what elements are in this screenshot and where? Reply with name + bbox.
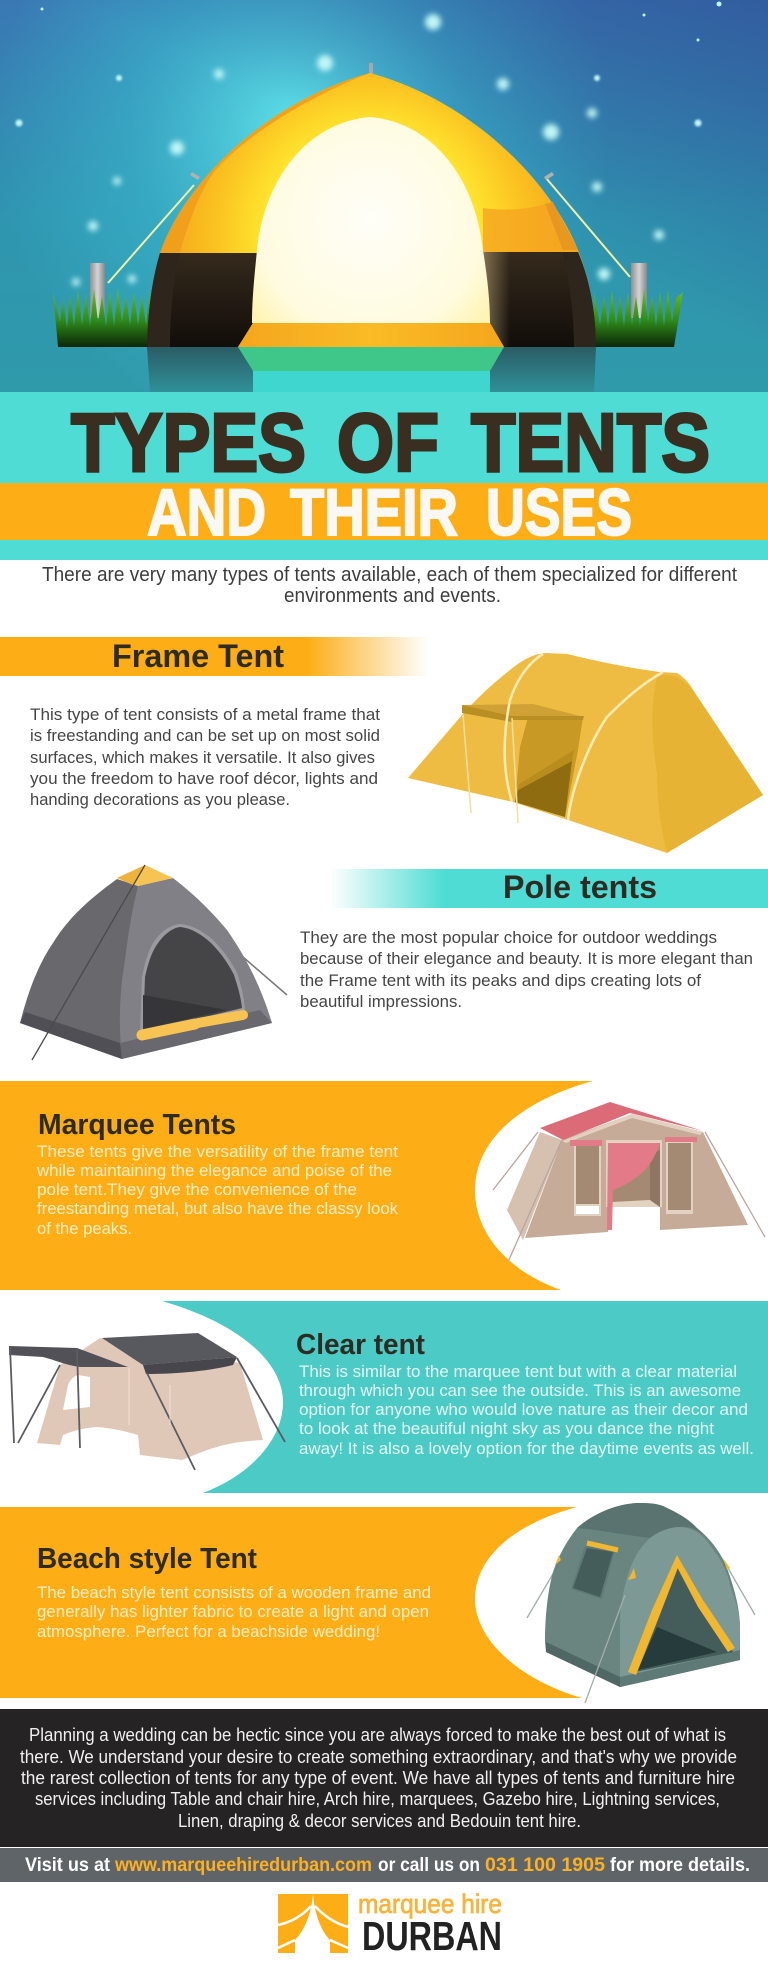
- hero: glowing tent at night: [0, 0, 768, 392]
- marquee heading: Marquee Tents: [38, 1109, 236, 1141]
- logo: marquee hire Durban: DURBAN: [362, 1913, 502, 1959]
- panel: beach style tent: [0, 1503, 755, 1703]
- icon: grey pole tent: [20, 865, 287, 1060]
- title banner: [0, 392, 768, 560]
- pole tents description: because of their elegance and beauty. It is more elegant than: [300, 949, 753, 968]
- fireflies: [16, 2, 722, 286]
- tent body: [147, 73, 596, 347]
- frame tent heading: Frame Tent: [112, 638, 284, 674]
- grass left: [53, 288, 150, 347]
- contact bar: 031 100 1905: [485, 1855, 605, 1876]
- logo wordmark: marquee hire: [358, 1889, 502, 1919]
- beach heading: Beach style Tent: [37, 1543, 257, 1575]
- frame tent description: you the freedom to have roof décor, lights and: [30, 769, 378, 788]
- closing text panel: [0, 1709, 768, 1847]
- pole tents description: beautiful impressions.: [300, 992, 462, 1011]
- title line 2: [147, 475, 632, 549]
- pole tents heading band: [330, 869, 768, 908]
- clear panel background: [162, 1301, 768, 1493]
- panel: frame tent: [0, 637, 763, 853]
- marquee description: freestanding metal, but also have the classy look: [37, 1199, 398, 1218]
- contact bar: www.marqueehiredurban.com: [114, 1855, 372, 1876]
- pole tents description: the Frame tent with its peaks and dips creating lots of: [300, 971, 701, 990]
- beach description: atmosphere. Perfect for a beachside wedding!: [37, 1622, 380, 1641]
- title line 1: OF: [337, 396, 439, 489]
- closing text panel: Planning a wedding can be hectic since you are always forced to make the best out of what is: [29, 1725, 726, 1745]
- intro text: [42, 564, 737, 607]
- frame tent description: surfaces, which makes it versatile. It also gives: [30, 748, 375, 767]
- frame tent heading band: [0, 637, 428, 676]
- beach description: The beach style tent consists of a wooden frame and: [37, 1583, 431, 1602]
- contact bar: for more details.: [610, 1855, 750, 1876]
- tent ropes and poles: [90, 63, 647, 318]
- clear description: This is similar to the marquee tent but with a clear material: [299, 1362, 737, 1381]
- pole tents heading: Pole tents: [503, 869, 657, 905]
- tent reflection: [147, 347, 596, 392]
- closing text panel: Linen, draping & decor services and Bedouin tent hire.: [178, 1811, 581, 1831]
- icon: clear tent: [9, 1333, 285, 1470]
- clear description: to look at the beautiful night sky as you dance the night: [299, 1419, 714, 1438]
- beach description: [37, 1583, 431, 1641]
- clear description: [299, 1362, 754, 1458]
- marquee description: of the peaks.: [37, 1219, 132, 1238]
- clear heading: Clear tent: [296, 1329, 425, 1361]
- title line 2: AND: [147, 475, 266, 549]
- intro text: There are very many types of tents available, each of them specialized for different: [42, 564, 737, 586]
- clear description: option for anyone who would love nature as their decor and: [299, 1400, 748, 1419]
- pole tents description: They are the most popular choice for outdoor weddings: [300, 928, 717, 947]
- marquee description: pole tent.They give the convenience of the: [37, 1180, 357, 1199]
- closing text panel: the rarest collection of tents for any type of event. We have all types of tents and furniture hire: [21, 1768, 735, 1788]
- frame tent description: handing decorations as you please.: [30, 790, 290, 809]
- beach description: generally has lighter fabric to create a light and open: [37, 1602, 429, 1621]
- intro text: environments and events.: [284, 585, 501, 607]
- icon: beach tent: [527, 1503, 755, 1703]
- contact bar: [0, 1848, 768, 1882]
- marquee panel background: [0, 1081, 593, 1290]
- frame tent description: This type of tent consists of a metal frame that: [30, 705, 380, 724]
- panel: clear tent: [9, 1301, 768, 1493]
- frame tent description: [30, 705, 380, 809]
- icon: yellow frame tent: [408, 653, 763, 853]
- contact bar: Visit us at: [25, 1855, 111, 1876]
- title line 1: [71, 396, 710, 489]
- marquee description: [36, 1142, 398, 1238]
- clear description: away! It is also a lovely option for the daytime events as well.: [299, 1439, 754, 1458]
- logo: marquee hire Durban: [278, 1889, 502, 1959]
- icon: logo marquee curtain: [278, 1894, 348, 1953]
- marquee description: while maintaining the elegance and poise of the: [36, 1161, 392, 1180]
- marquee description: These tents give the versatility of the frame tent: [37, 1142, 398, 1161]
- panel: marquee tents: [0, 1081, 765, 1290]
- beach panel background: [0, 1507, 582, 1698]
- pole tents description: [300, 928, 753, 1011]
- icon: marquee tent: [493, 1102, 765, 1262]
- clear description: through which you can see the outside. This is an awesome: [299, 1381, 741, 1400]
- contact bar: or call us on: [378, 1855, 480, 1876]
- title line 2: USES: [486, 475, 632, 549]
- closing text panel: there. We understand your desire to create something extraordinary, and that's why we provide: [20, 1747, 737, 1767]
- grass right: [594, 288, 683, 347]
- title line 1: TENTS: [471, 396, 710, 489]
- title line 2: THEIR: [290, 475, 458, 549]
- title line 1: TYPES: [71, 396, 306, 489]
- frame tent description: is freestanding and can be set up on most solid: [30, 726, 380, 745]
- panel: pole tents: [20, 865, 768, 1060]
- closing text panel: services including Table and chair hire, Arch hire, marquees, Gazebo hire, Lightning services,: [35, 1789, 720, 1809]
